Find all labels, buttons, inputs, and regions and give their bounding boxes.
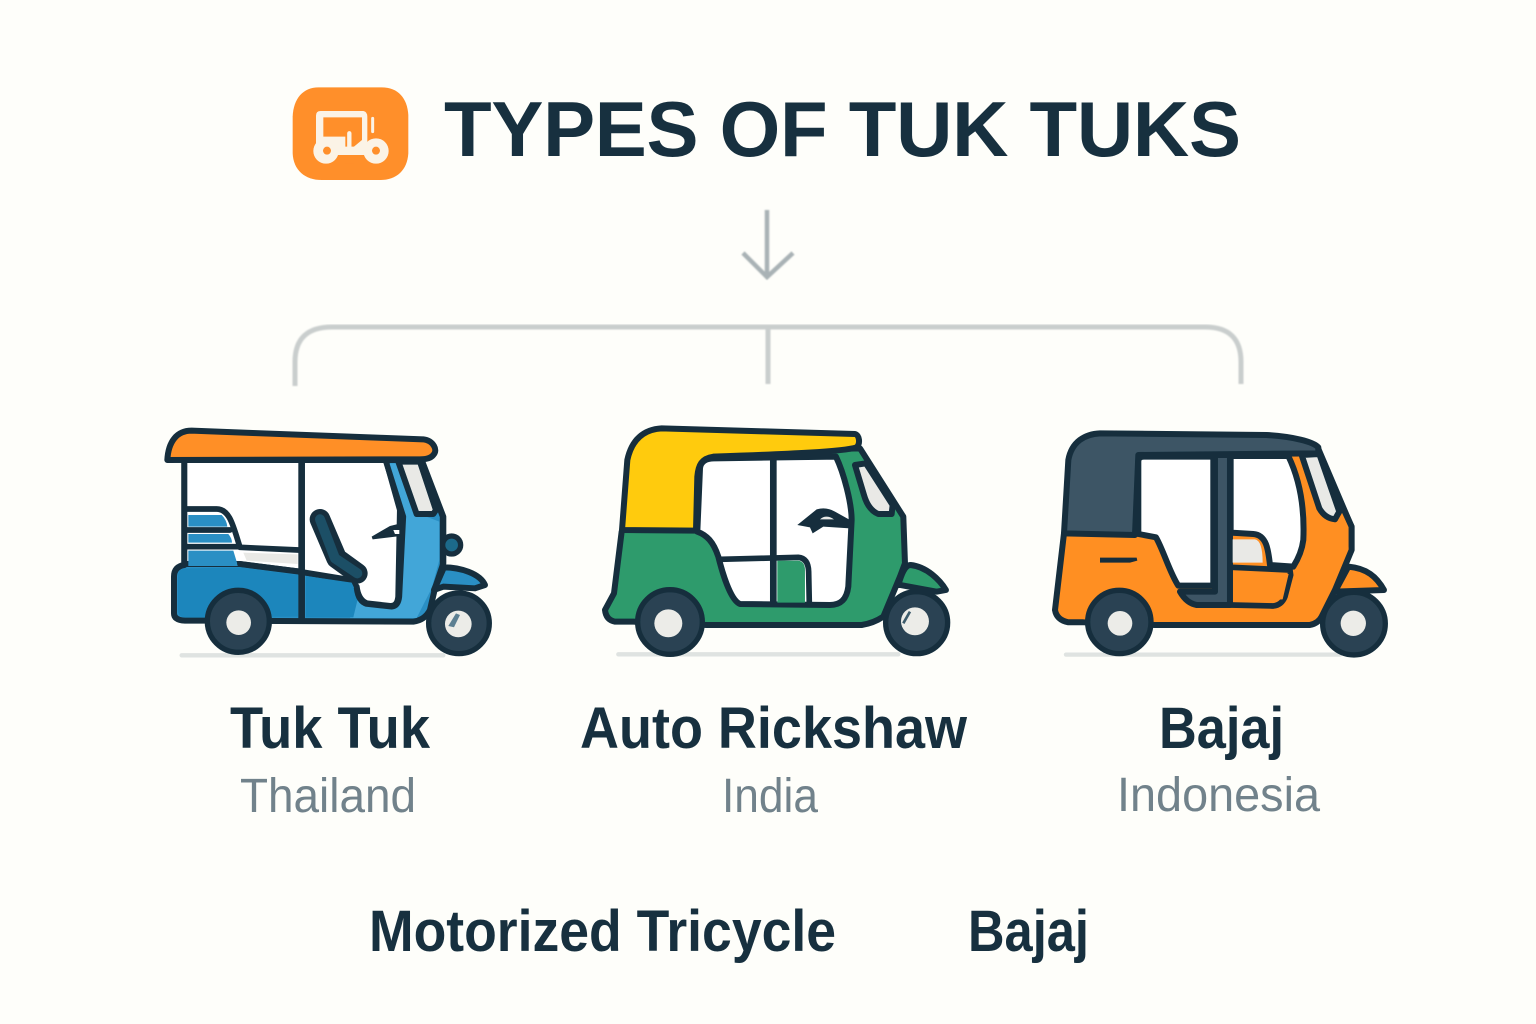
rear wheel	[207, 590, 269, 652]
headlight	[443, 536, 461, 554]
arrow: down	[743, 210, 793, 277]
front windscreen	[855, 463, 893, 514]
label: Motorized Tricycle: Motorized Tricycle	[369, 899, 836, 964]
front wheel	[1323, 592, 1385, 655]
title: TYPES OF TUK TUKS	[444, 85, 1241, 173]
rear wheel	[638, 590, 702, 654]
front wheel	[886, 592, 948, 654]
driver seat	[320, 519, 357, 573]
seat	[1233, 539, 1263, 563]
centre pillar	[1180, 455, 1230, 605]
front wheel	[429, 593, 489, 654]
label: Bajaj bottom: Bajaj	[968, 899, 1089, 964]
ground shadow	[182, 649, 443, 662]
rear panel	[178, 567, 298, 617]
vehicle: blue tuk tuk	[167, 431, 489, 655]
fender	[1335, 567, 1384, 592]
label: India: India	[722, 770, 818, 823]
bracket connector	[295, 327, 1241, 386]
label: Bajaj: Bajaj	[1159, 696, 1284, 761]
body	[605, 448, 905, 625]
rear wheel	[1088, 590, 1151, 654]
door panel	[306, 576, 358, 617]
roof	[167, 431, 435, 460]
yellow roof	[622, 428, 859, 531]
mirror	[797, 508, 850, 533]
body	[1055, 450, 1352, 625]
passenger opening	[184, 460, 400, 606]
front window	[1231, 456, 1304, 567]
vehicle: orange bajaj	[1055, 433, 1385, 655]
mirror	[372, 523, 401, 539]
label: Tuk Tuk: Tuk Tuk	[230, 696, 431, 761]
fender	[434, 567, 485, 590]
vehicle: green auto rickshaw	[605, 428, 948, 654]
side vent	[1100, 558, 1137, 563]
ground shadow	[618, 648, 898, 661]
front windscreen	[398, 462, 436, 514]
centre post	[763, 458, 783, 605]
cabin opening	[697, 457, 852, 605]
dark roof	[1064, 433, 1318, 535]
body	[174, 460, 443, 622]
label: Indonesia: Indonesia	[1117, 769, 1320, 822]
rear window	[1138, 457, 1213, 586]
rear seat	[184, 509, 298, 550]
windscreen	[1302, 454, 1339, 519]
label: Auto Rickshaw: Auto Rickshaw	[580, 696, 968, 761]
label: Thailand: Thailand	[240, 770, 416, 823]
front cowl	[350, 463, 439, 618]
seat panel	[777, 561, 805, 603]
icon: orange tuk tuk badge	[293, 87, 408, 180]
ground shadow	[1066, 648, 1340, 661]
centre post	[292, 460, 312, 620]
fender	[898, 565, 946, 592]
